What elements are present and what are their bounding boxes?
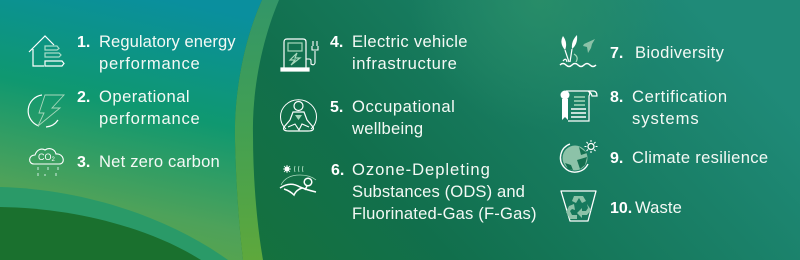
- label 4: [352, 32, 468, 73]
- label 1: Regulatory energy: [99, 32, 236, 51]
- label 6: [352, 160, 537, 223]
- icon: sun, heat and landscape: [280, 165, 316, 196]
- icon: CO2 cloud: [29, 148, 64, 176]
- item 1: regulatory energy performance: [28, 32, 236, 73]
- label 4: Electric vehicle: [352, 32, 468, 51]
- number 8: 8.: [610, 89, 623, 106]
- label 5: Occupational: [352, 97, 455, 116]
- label 1: [99, 32, 236, 73]
- number 5: 5.: [330, 99, 343, 116]
- item 3: net zero carbon: [29, 148, 220, 176]
- label 9: Climate resilience: [632, 148, 768, 167]
- label 8: Certification: [632, 87, 728, 106]
- item 4: electric vehicle infrastructure: [280, 32, 468, 73]
- item 8: certification systems: [560, 87, 728, 128]
- icon: house with energy bars: [28, 35, 65, 67]
- item 2: operational performance: [28, 87, 201, 128]
- label 3: Net zero carbon: [99, 152, 220, 171]
- number 10: 10.: [610, 200, 632, 217]
- number 6: 6.: [331, 162, 344, 179]
- number 4: 4.: [330, 34, 343, 51]
- label 6: Substances (ODS) and: [352, 182, 525, 201]
- number 1: 1.: [77, 34, 90, 51]
- label 6: Ozone-Depleting: [352, 160, 491, 179]
- number 3: 3.: [77, 154, 90, 171]
- label 10: Waste: [635, 198, 682, 217]
- label 1: performance: [99, 54, 201, 73]
- item 6: ODS and F-Gas: [280, 160, 537, 223]
- label 4: infrastructure: [352, 54, 458, 73]
- number 2: 2.: [77, 89, 90, 106]
- number 9: 9.: [610, 150, 623, 167]
- label 2: [99, 87, 201, 128]
- icon: certificate scroll: [560, 90, 598, 122]
- label 2: Operational: [99, 87, 190, 106]
- item 5: occupational wellbeing: [280, 97, 455, 138]
- icon: globe with sun: [560, 140, 598, 173]
- icon: reeds, bird and water: [560, 35, 596, 68]
- label 2: performance: [99, 109, 201, 128]
- label 5: [352, 97, 455, 138]
- item 7: biodiversity: [560, 35, 724, 68]
- icon: CO2 cloud: 2: [52, 157, 56, 163]
- label 8: systems: [632, 109, 700, 128]
- icon: EV charger: [280, 38, 319, 72]
- icon: circle with lightning bolt: [28, 94, 65, 128]
- label 5: wellbeing: [352, 119, 423, 138]
- item 9: climate resilience: [560, 140, 768, 173]
- label 6: Fluorinated-Gas (F-Gas): [352, 204, 537, 223]
- icon: CO2 cloud: CO: [38, 152, 52, 162]
- item 10: waste: [560, 190, 682, 222]
- label 8: [632, 87, 728, 128]
- number 7: 7.: [610, 45, 623, 62]
- label 7: Biodiversity: [635, 43, 724, 62]
- icon: recycling bin: [560, 190, 597, 222]
- icon: meditating person: [280, 99, 317, 132]
